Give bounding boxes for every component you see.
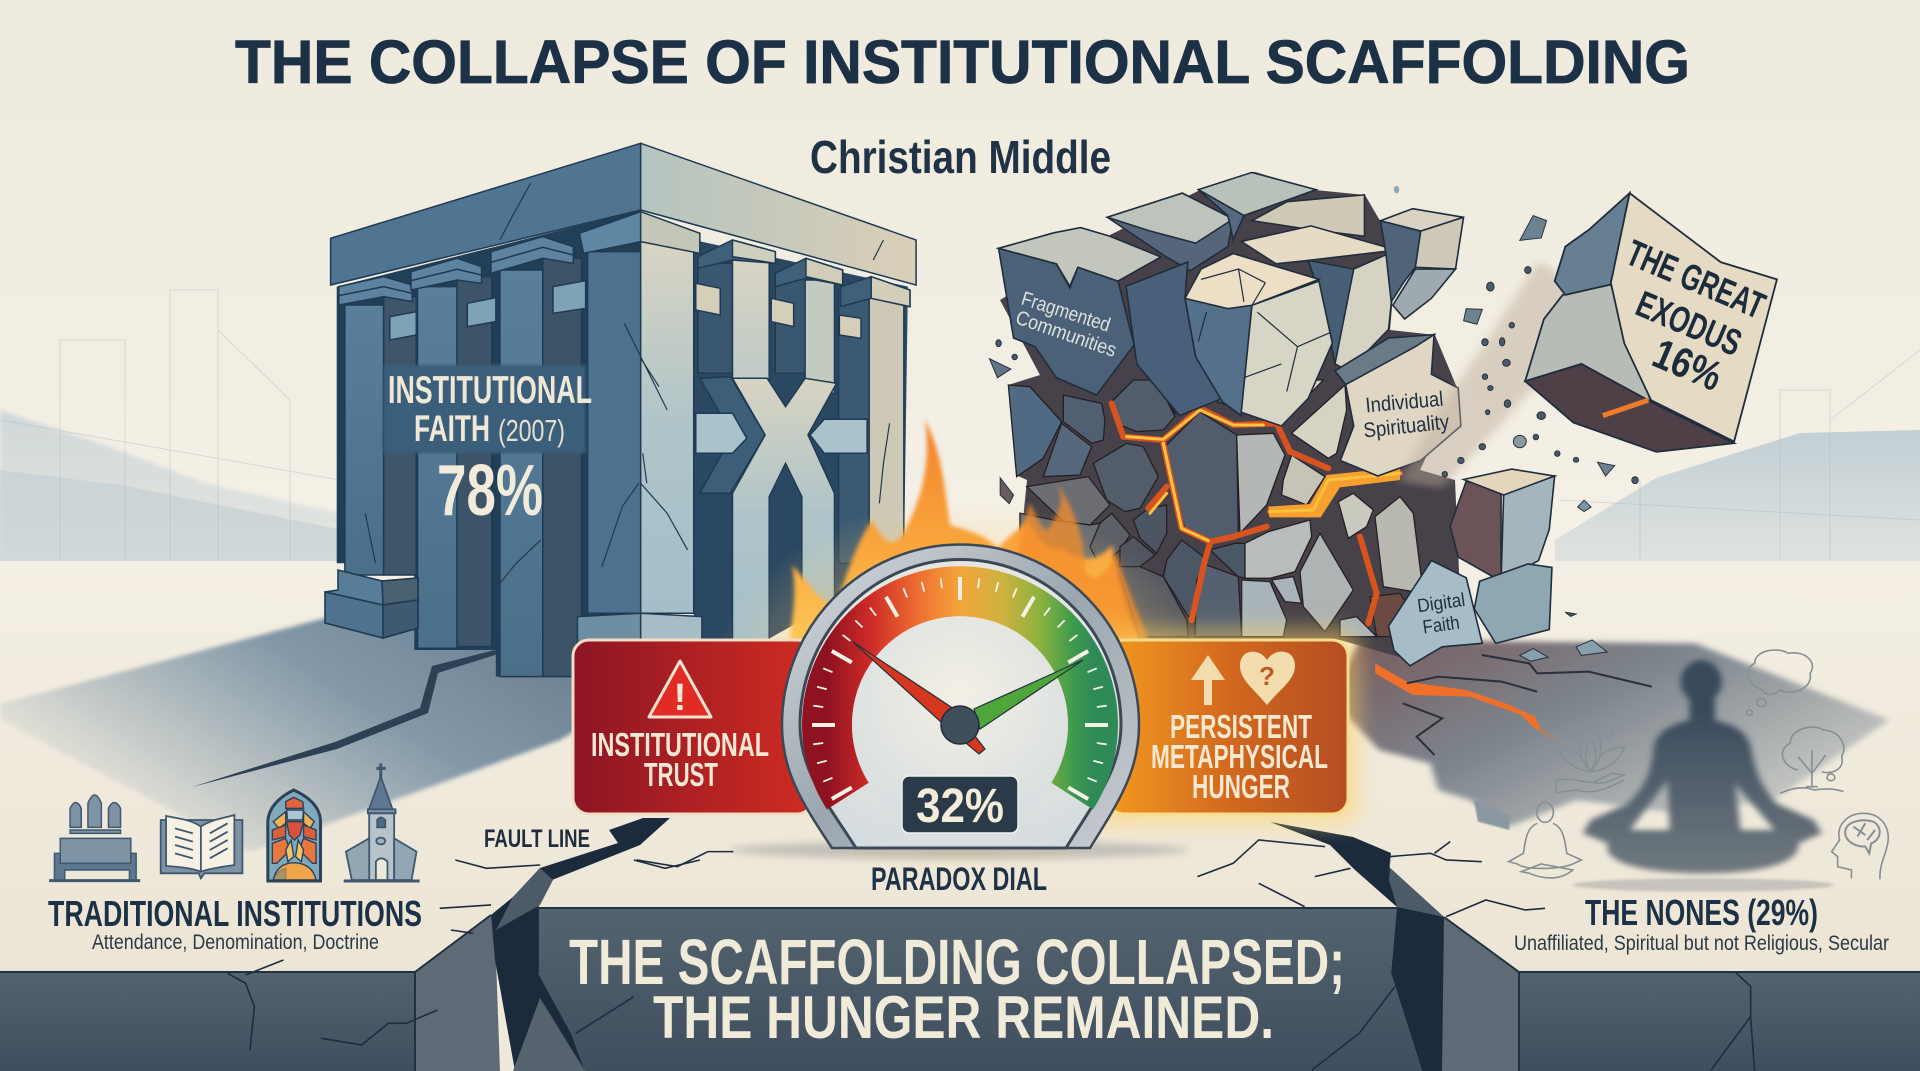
dust trail and exodus block	[989, 186, 1777, 661]
icon: rising arrow and heart	[1191, 652, 1295, 705]
panel: institutional trust: INSTITUTIONAL	[591, 726, 769, 763]
column 1	[339, 277, 416, 575]
right slab	[1519, 972, 1920, 1071]
lower cracked cells	[1008, 380, 1430, 637]
paradox dial label: PARADOX DIAL	[871, 861, 1047, 897]
icon: open book	[161, 815, 242, 878]
icon: head with brain	[1832, 813, 1888, 879]
icon: pew	[49, 795, 140, 881]
roof	[331, 143, 641, 285]
crack in temple shadow	[192, 650, 498, 787]
panel: institutional trust: TRUST	[644, 756, 718, 793]
traditional institutions label	[48, 893, 422, 954]
rubble labels: Digital	[1416, 590, 1466, 617]
temple label	[388, 369, 592, 531]
coloured gauge arc	[827, 591, 1093, 796]
rubble labels: Individual	[1365, 388, 1444, 417]
christian middle heading: Christian Middle	[810, 131, 1111, 183]
rubble labels: Fragmented	[1019, 288, 1113, 337]
panel: persistent metaphysical hunger: METAPHYSICAL	[1151, 738, 1328, 775]
rubble labels: Communities	[1013, 307, 1119, 362]
temple ground shadow	[0, 618, 660, 852]
icons: traditional institutions	[49, 763, 420, 881]
icon: small meditator	[1509, 802, 1581, 878]
temple label: INSTITUTIONAL	[388, 369, 592, 412]
gauge ticks	[812, 577, 1108, 799]
right crack	[1270, 822, 1444, 1071]
icon: tree	[1780, 727, 1844, 793]
rubble base mass	[1000, 172, 1462, 660]
left crack	[491, 818, 670, 1071]
fault line label: FAULT LINE	[484, 825, 590, 853]
the nones label	[1514, 892, 1889, 955]
icon: rising arrow and heart: ?	[1259, 661, 1275, 691]
temple label: 78%	[437, 451, 543, 531]
column 1 base	[325, 570, 418, 638]
conclusion text: THE SCAFFOLDING COLLAPSED;	[569, 926, 1345, 998]
rubble labels: THE GREAT	[1621, 232, 1771, 327]
line icons	[1509, 650, 1888, 879]
left slab	[0, 972, 415, 1071]
red needle	[853, 642, 985, 754]
central slab	[538, 908, 1422, 1071]
icon: warning triangle	[649, 661, 711, 719]
lava veins	[1112, 387, 1400, 623]
panel: institutional trust	[573, 640, 813, 814]
dial bezel	[782, 544, 1139, 848]
stone: individual spirituality	[1340, 335, 1461, 476]
panel: persistent metaphysical hunger: HUNGER	[1192, 768, 1290, 805]
temple label: FAITH	[414, 408, 490, 449]
conclusion text	[569, 926, 1345, 1051]
traditional institutions label: TRADITIONAL INSTITUTIONS	[48, 893, 422, 934]
icon: church	[344, 763, 420, 881]
beams	[390, 312, 416, 340]
green needle	[974, 660, 1083, 729]
bottom ground: fault line slabs	[0, 818, 1920, 1071]
paradox dial gauge	[730, 544, 1190, 859]
the great exodus block	[1525, 193, 1777, 452]
the nones: meditating silhouette and icons	[1509, 650, 1888, 892]
text backing band	[384, 365, 586, 453]
panel: persistent metaphysical hunger	[1080, 628, 1360, 826]
rubble labels	[1013, 232, 1771, 639]
rubble labels: Spirituality	[1362, 411, 1451, 442]
traditional institutions label: Attendance, Denomination, Doctrine	[92, 931, 379, 954]
upper blocks	[999, 172, 1555, 666]
temple label: (2007)	[498, 413, 565, 448]
column 2	[411, 258, 492, 648]
rubble column: christian middle	[989, 172, 1777, 666]
rubble labels: Faith	[1421, 613, 1461, 639]
icon: stained glass window	[268, 790, 321, 881]
icon: thought cloud	[1746, 650, 1812, 715]
title: THE COLLAPSE OF INSTITUTIONAL SCAFFOLDING	[235, 28, 1690, 96]
dial value: 32%	[916, 780, 1004, 833]
hairline cracks	[228, 860, 700, 1050]
flames behind the dial	[710, 420, 1210, 880]
corner column	[577, 212, 702, 650]
conclusion text: THE HUNGER REMAINED.	[653, 984, 1274, 1051]
rubble labels: EXODUS	[1630, 283, 1748, 364]
rubble labels: 16%	[1646, 329, 1729, 400]
icon: lotus in hand	[1556, 722, 1625, 793]
flying debris	[989, 186, 1638, 661]
temple: institutional faith	[325, 143, 916, 677]
silhouette	[1583, 660, 1822, 873]
icon: warning triangle: !	[674, 677, 686, 719]
column 3	[491, 237, 582, 677]
stone: digital faith	[1389, 561, 1482, 666]
panel: persistent metaphysical hunger: PERSISTENT	[1170, 708, 1312, 745]
cracks	[365, 183, 890, 583]
right shadow of fallen rubble	[1340, 640, 1889, 830]
the nones label: THE NONES (29%)	[1585, 892, 1818, 933]
needle hub	[941, 706, 979, 744]
X brace	[696, 377, 867, 650]
right side columns	[696, 240, 910, 660]
lava crack on floor	[1375, 655, 1652, 755]
